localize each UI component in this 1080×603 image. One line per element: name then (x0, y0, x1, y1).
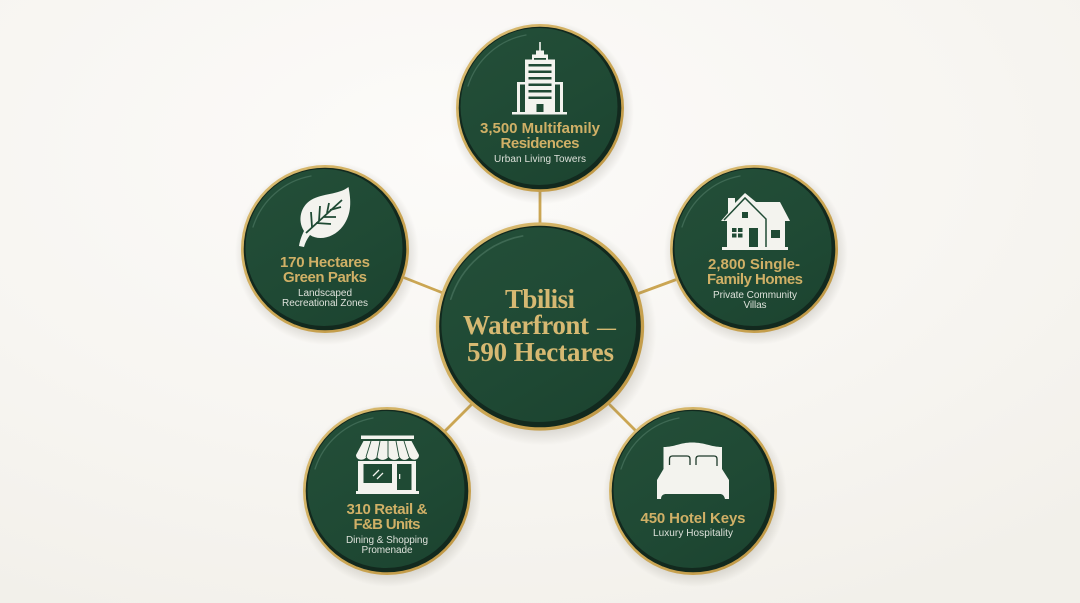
label: 170 Hectares Green Parks: 170 Hectares (280, 254, 370, 271)
connectors (405, 190, 675, 431)
label: 450 Hotel Keys: 450 Hotel Keys (640, 510, 746, 527)
sublabel: Private Community (713, 290, 797, 301)
node: multifamily residences (450, 20, 634, 204)
node: green parks: Recreational Zones (282, 298, 368, 309)
label: 310 Retail & F&B Units: 310 Retail & (346, 501, 428, 518)
icon: tower (512, 42, 567, 114)
node: retail and F&B: F&B Units (354, 516, 420, 533)
node: single-family homes: Villas (744, 300, 766, 311)
central hub (428, 217, 657, 446)
node: hotel keys (603, 403, 787, 587)
sublabel: Dining & Shopping (346, 535, 428, 546)
label: 2,800 Single-Family Homes: 2,800 Single- (708, 256, 800, 273)
sublabel: Landscaped (298, 288, 352, 299)
node: green parks (235, 161, 419, 345)
node: retail and F&B: Promenade (362, 545, 413, 556)
title: Tbilisi Waterfront — 590 Hectares: 590 Hectares (467, 337, 614, 367)
icon: storefront (356, 436, 419, 494)
node: green parks: Green Parks (283, 269, 367, 286)
sublabel: Urban Living Towers (494, 154, 586, 165)
sublabel: Luxury Hospitality (653, 528, 733, 539)
icon: bed (657, 442, 729, 499)
label: 3,500 Multifamily Residences: 3,500 Multifamily (480, 120, 601, 137)
icon: house (721, 193, 790, 250)
node: retail and F&B (297, 403, 481, 587)
title: Tbilisi Waterfront — 590 Hectares: Waterfront (463, 310, 589, 340)
node: multifamily residences: Residences (500, 135, 580, 152)
title: Tbilisi Waterfront — 590 Hectares (463, 284, 617, 367)
node: single-family homes: Family Homes (707, 271, 803, 288)
title: Tbilisi Waterfront — 590 Hectares: — (596, 318, 617, 339)
node: single-family homes (664, 161, 848, 345)
title: Tbilisi Waterfront — 590 Hectares: Tbilisi (505, 284, 575, 314)
icon: leaf (299, 187, 350, 247)
